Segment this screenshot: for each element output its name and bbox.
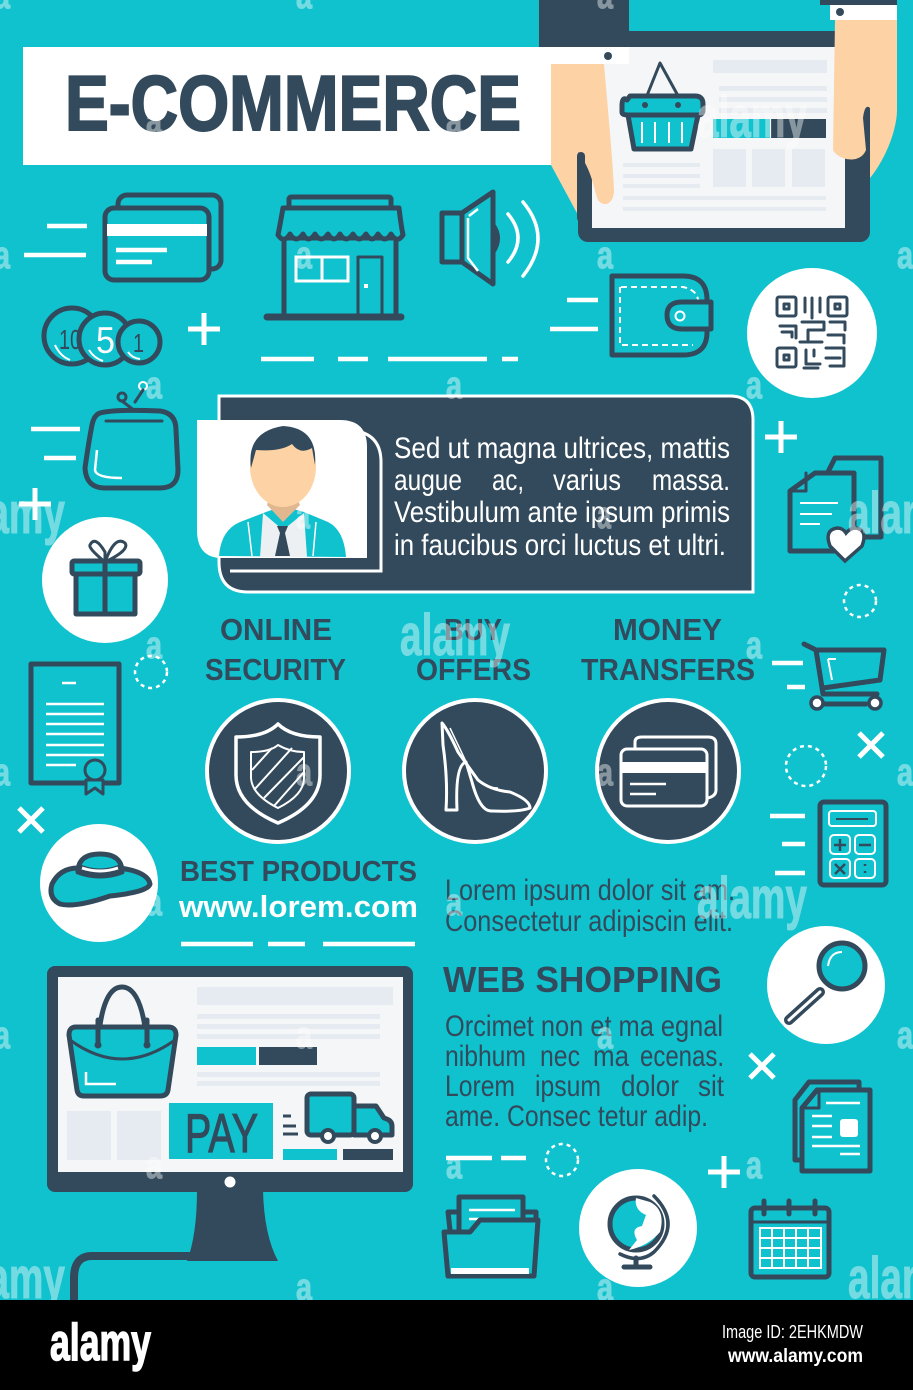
website address: www.lorem.com bbox=[178, 889, 418, 924]
icon: close mark bbox=[19, 808, 43, 832]
image id: Image ID: 2EHKMDW bbox=[722, 1322, 863, 1342]
dashed circle bbox=[786, 746, 826, 786]
watermarks: a bbox=[296, 495, 311, 537]
watermarks: a bbox=[146, 1145, 163, 1187]
watermarks: a bbox=[446, 1145, 463, 1187]
right hand bbox=[833, 20, 897, 178]
heading: money transfers: MONEY bbox=[613, 612, 722, 647]
watermarks: a bbox=[296, 752, 313, 794]
watermarks: a bbox=[146, 365, 163, 407]
watermarks: a bbox=[746, 365, 763, 407]
text: web shopping paragraph: Orcimet non et ma egnal bbox=[445, 1010, 723, 1043]
watermarks: a bbox=[296, 235, 313, 277]
heading: buy offers bbox=[416, 612, 531, 687]
watermarks: a bbox=[296, 1267, 313, 1309]
heading: money transfers: TRANSFERS bbox=[581, 652, 755, 687]
panel text: in faucibus orci luctus et ultri. bbox=[394, 529, 726, 562]
pay button: PAY bbox=[185, 1102, 258, 1164]
text: lorem intro: Consectetur adipiscin elit. bbox=[445, 905, 733, 938]
text: lorem intro: Lorem ipsum dolor sit am. bbox=[445, 874, 735, 907]
icon: plus bbox=[708, 1156, 740, 1188]
heading: web shopping: WEB SHOPPING bbox=[443, 959, 722, 1000]
text: web shopping paragraph: nec bbox=[540, 1040, 580, 1073]
icon: folder bbox=[444, 1197, 538, 1276]
icon: certificate bbox=[31, 664, 119, 794]
left hand bbox=[551, 64, 614, 215]
icon: speaker bbox=[442, 192, 538, 284]
icon: gift bbox=[42, 517, 168, 643]
dashed circle bbox=[844, 585, 876, 617]
icon: coins bbox=[44, 308, 160, 365]
icon: bank cards badge bbox=[597, 700, 739, 842]
watermarks: a bbox=[146, 625, 163, 667]
text: web shopping paragraph: ipsum bbox=[535, 1070, 601, 1103]
watermarks: alamy bbox=[697, 866, 807, 931]
watermarks: a bbox=[446, 882, 463, 924]
icon: wallet bbox=[550, 276, 711, 355]
icon: close mark bbox=[750, 1054, 774, 1078]
speech panel bbox=[197, 396, 753, 592]
icon: basket bbox=[622, 63, 703, 149]
icon: delivery truck bbox=[283, 1094, 392, 1142]
icon: plus bbox=[188, 313, 220, 345]
heading: online security: ONLINE bbox=[220, 612, 332, 647]
text: web shopping paragraph bbox=[445, 1010, 725, 1133]
text: web shopping paragraph: sit bbox=[698, 1070, 725, 1103]
icon: calculator bbox=[770, 802, 886, 885]
text: lorem intro bbox=[445, 874, 735, 938]
text: web shopping paragraph: ma bbox=[593, 1040, 629, 1073]
watermarks: a bbox=[296, 1015, 313, 1057]
panel text bbox=[394, 432, 730, 562]
panel text: varius bbox=[553, 464, 621, 497]
dashed circle bbox=[546, 1144, 578, 1176]
icon: paper documents bbox=[795, 1082, 870, 1171]
watermarks: alamy bbox=[400, 603, 510, 668]
icon: shield badge bbox=[207, 700, 349, 842]
avatar card bbox=[197, 420, 381, 571]
dashes: store divider bbox=[261, 357, 518, 361]
title banner: E-COMMERCE bbox=[65, 59, 521, 147]
icon: QR code bbox=[747, 268, 877, 398]
icon: plus bbox=[19, 488, 51, 520]
heading: online security bbox=[205, 612, 346, 687]
watermarks: a bbox=[597, 235, 614, 277]
alamy logo: alamy bbox=[50, 1314, 151, 1372]
watermarks: a bbox=[446, 365, 463, 407]
watermarks: a bbox=[146, 100, 163, 142]
icon: shopping cart bbox=[772, 644, 884, 709]
icon: plus bbox=[765, 421, 797, 453]
monitor stand and cable bbox=[187, 1190, 278, 1261]
icon: magnifier bbox=[767, 926, 885, 1044]
text: web shopping paragraph: ecenas. bbox=[640, 1040, 724, 1073]
heading: best products: BEST PRODUCTS bbox=[180, 856, 417, 888]
footer url: www.alamy.com bbox=[727, 1346, 863, 1367]
footer bar bbox=[0, 1300, 913, 1390]
watermarks: a bbox=[446, 100, 463, 142]
heading: money transfers bbox=[581, 612, 755, 687]
dashed circle bbox=[135, 656, 167, 688]
text: web shopping paragraph: nibhum bbox=[445, 1040, 526, 1073]
icon: handbag bbox=[69, 987, 176, 1096]
icon: credit cards bbox=[24, 195, 221, 280]
icon: sun hat bbox=[40, 824, 158, 942]
watermarks: a bbox=[597, 752, 614, 794]
icon: store bbox=[267, 197, 403, 317]
title banner bbox=[23, 47, 551, 165]
heading: online security: SECURITY bbox=[205, 652, 346, 687]
dashes: footer divider bbox=[446, 1156, 526, 1160]
icon: globe bbox=[579, 1169, 697, 1287]
icon: coins: 5 bbox=[96, 320, 115, 361]
icon: close mark bbox=[859, 733, 883, 757]
left sleeve bbox=[539, 0, 629, 47]
icon: coins: 1 bbox=[133, 328, 144, 358]
watermarks: alamy bbox=[697, 85, 807, 150]
watermarks: a bbox=[597, 495, 612, 537]
text: web shopping paragraph: dolor bbox=[621, 1070, 679, 1103]
text: web shopping paragraph: Lorem bbox=[445, 1070, 515, 1103]
watermarks: a bbox=[746, 625, 763, 667]
panel text: augue bbox=[394, 464, 462, 497]
right sleeve bbox=[820, 0, 897, 5]
dashes: website divider bbox=[181, 942, 415, 946]
watermarks: a bbox=[146, 882, 163, 924]
icon: documents with heart bbox=[790, 458, 881, 561]
panel text: Vestibulum ante ipsum primis bbox=[394, 496, 730, 529]
watermarks: a bbox=[597, 1015, 614, 1057]
tablet held in hands bbox=[539, 0, 897, 242]
heading: buy offers: OFFERS bbox=[416, 652, 531, 687]
panel text: massa. bbox=[652, 464, 730, 497]
heading: buy offers: BUY bbox=[444, 612, 502, 647]
icon: calendar bbox=[751, 1201, 829, 1277]
panel text: ac, bbox=[492, 464, 524, 497]
monitor with shop page bbox=[47, 966, 413, 1300]
watermarks: a bbox=[746, 1145, 763, 1187]
panel text: Sed ut magna ultrices, mattis bbox=[394, 432, 730, 465]
text: web shopping paragraph: ame. Consec tetur adip. bbox=[445, 1100, 708, 1133]
icon: high heel badge bbox=[404, 700, 546, 842]
icon: coin purse bbox=[31, 382, 178, 488]
watermarks: a bbox=[597, 1267, 614, 1309]
icon: coins: 10 bbox=[59, 324, 81, 355]
